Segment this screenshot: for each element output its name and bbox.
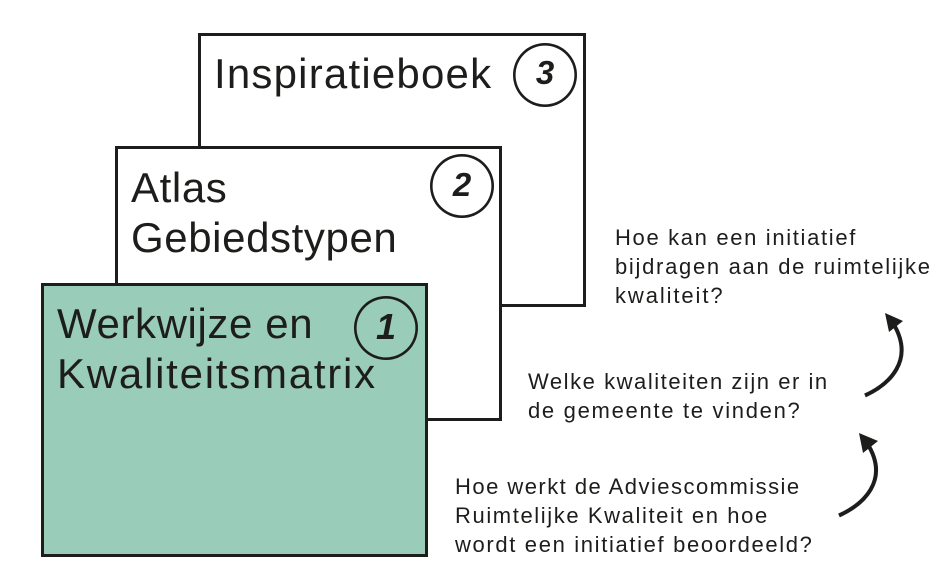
text: question about initiative: bijdragen aan de ruimtelijke: [615, 254, 932, 279]
icon: number 3: [513, 43, 577, 107]
text: question about committee: [455, 474, 814, 557]
text: question about qualities: Welke kwaliteiten zijn er in: [528, 369, 829, 394]
heading: Werkwijze en Kwaliteitsmatrix: Werkwijze en: [57, 300, 313, 347]
panel: card 1 Werkwijze en Kwaliteitsmatrix: [41, 283, 428, 557]
heading: Atlas Gebiedstypen: [131, 164, 397, 261]
heading: Atlas Gebiedstypen: Gebiedstypen: [131, 214, 397, 261]
icon: number 2: 2: [453, 166, 471, 203]
panel: card 2 Atlas Gebiedstypen: [115, 146, 502, 421]
icon: number 3: 3: [536, 54, 554, 91]
arrow: lower: [838, 433, 878, 518]
text: question about initiative: Hoe kan een initiatief: [615, 225, 857, 250]
text: question about committee: Hoe werkt de Adviescommissie: [455, 474, 801, 499]
text: question about initiative: [615, 225, 932, 308]
text: question about committee: wordt een initiatief beoordeeld?: [455, 532, 814, 557]
heading: Werkwijze en Kwaliteitsmatrix: [57, 300, 377, 397]
text: question about qualities: [528, 369, 829, 423]
icon: number 2: [430, 154, 494, 218]
icon: number 1: 1: [376, 306, 396, 347]
arrow: upper: [864, 313, 904, 398]
icon: number 1: [354, 296, 418, 360]
heading: Werkwijze en Kwaliteitsmatrix: Kwaliteitsmatrix: [57, 350, 377, 397]
text: question about qualities: de gemeente te vinden?: [528, 398, 801, 423]
text: question about committee: Ruimtelijke Kwaliteit en hoe: [455, 503, 769, 528]
heading: Atlas Gebiedstypen: Atlas: [131, 164, 227, 211]
heading: Inspiratieboek: Inspiratieboek: [214, 50, 492, 97]
text: question about initiative: kwaliteit?: [615, 283, 724, 308]
panel: card 3 Inspiratieboek: [198, 33, 586, 307]
